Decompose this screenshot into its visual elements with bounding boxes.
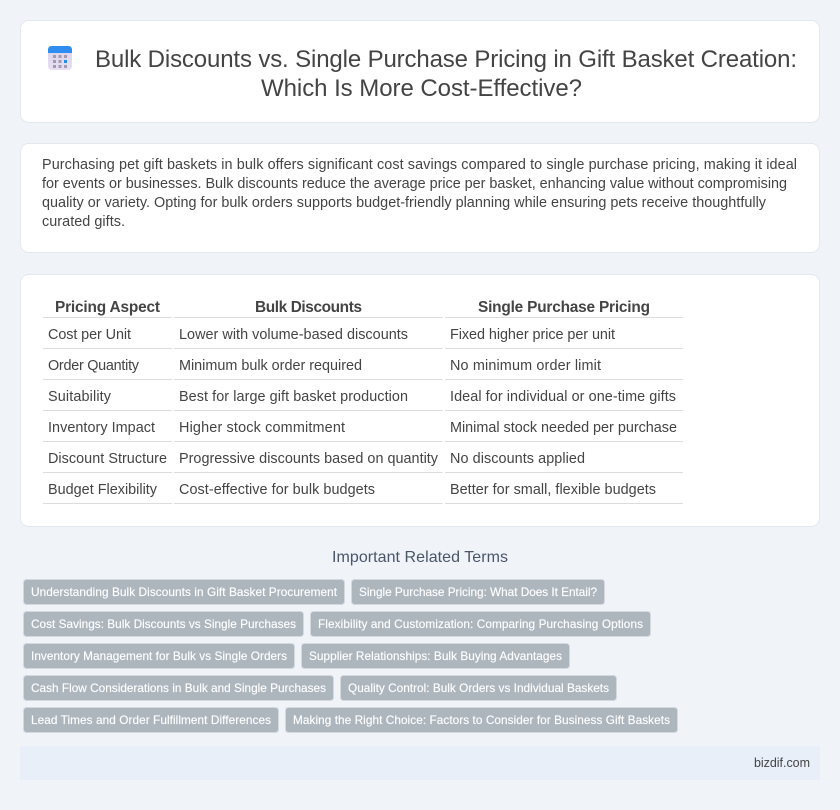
tag group: related terms (24, 580, 678, 732)
icon: calendar (48, 46, 72, 70)
table row: discount structure (48, 451, 585, 467)
table row: inventory impact: Inventory Impact (48, 420, 155, 436)
table header: Bulk Discounts (255, 299, 362, 316)
table row: budget flexibility: Budget Flexibility (48, 482, 158, 498)
table row: order quantity: No minimum order limit (450, 358, 601, 374)
table header: Single Purchase Pricing (478, 299, 650, 316)
table row: inventory impact (48, 420, 677, 436)
title (95, 46, 797, 102)
heading: related terms: Important Related Terms (332, 549, 508, 566)
table row: budget flexibility (48, 482, 656, 498)
text block: summary paragraph: Purchasing pet gift baskets in bulk offers significant cost savings compared to single purchase pricing, making it ideal (42, 157, 797, 173)
text block: summary paragraph (42, 157, 797, 230)
tag (24, 612, 304, 636)
table row: order quantity: Minimum bulk order required (179, 358, 362, 374)
tag: Making the Right Choice: Factors to Consider for Business Gift Baskets (293, 713, 670, 727)
tag (340, 676, 616, 700)
tag: Cost Savings: Bulk Discounts vs Single Purchases (31, 617, 296, 631)
tag (286, 708, 678, 732)
tag: Flexibility and Customization: Comparing Purchasing Options (318, 617, 643, 631)
table row: discount structure: Progressive discounts based on quantity (179, 451, 439, 467)
tag: Quality Control: Bulk Orders vs Individual Baskets (348, 681, 609, 695)
table row: cost per unit: Cost per Unit (48, 327, 131, 343)
tag: Inventory Management for Bulk vs Single Orders (31, 649, 287, 663)
text block: summary paragraph: curated gifts. (42, 214, 125, 230)
table row: order quantity (48, 358, 601, 374)
table row: suitability: Best for large gift basket production (179, 389, 408, 405)
tag (24, 644, 294, 668)
tag (352, 580, 604, 604)
table row: cost per unit (48, 327, 615, 343)
table row: discount structure: No discounts applied (450, 451, 585, 467)
table row: discount structure: Discount Structure (48, 451, 167, 467)
table row: suitability (48, 389, 676, 405)
table header: Pricing Aspect (55, 299, 160, 316)
tag (24, 580, 344, 604)
tag (302, 644, 570, 668)
table row: budget flexibility: Cost-effective for bulk budgets (179, 482, 375, 498)
footer (20, 746, 820, 780)
tag (24, 708, 278, 732)
title: Which Is More Cost-Effective? (261, 75, 582, 102)
table row: cost per unit: Lower with volume-based discounts (179, 327, 408, 343)
title: Bulk Discounts vs. Single Purchase Pricing in Gift Basket Creation: (95, 46, 797, 73)
table row: suitability: Suitability (48, 389, 112, 405)
table row: suitability: Ideal for individual or one-time gifts (450, 389, 676, 405)
table row: order quantity: Order Quantity (48, 358, 140, 374)
tag: Single Purchase Pricing: What Does It Entail? (359, 585, 597, 599)
footer credit: bizdif.com (754, 756, 810, 770)
tag (24, 676, 334, 700)
panel: header (20, 20, 820, 122)
tag: Lead Times and Order Fulfillment Differences (31, 713, 271, 727)
text block: summary paragraph: for events or businesses. Bulk discounts reduce the average price per basket, enhancing value without compromising (42, 176, 787, 192)
panel: summary (20, 144, 820, 252)
tag (310, 612, 650, 636)
tag: Supplier Relationships: Bulk Buying Advantages (309, 649, 562, 663)
table row: inventory impact: Minimal stock needed per purchase (450, 420, 677, 436)
tag: Understanding Bulk Discounts in Gift Basket Procurement (31, 585, 338, 599)
table header (55, 299, 650, 316)
text block: summary paragraph: quality or variety. Opting for bulk orders supports budget-friendly planning while ensuring pets receive thoughtfully (42, 195, 767, 211)
table row: inventory impact: Higher stock commitment (179, 420, 345, 436)
table row: budget flexibility: Better for small, flexible budgets (450, 482, 656, 498)
tag: Cash Flow Considerations in Bulk and Single Purchases (31, 681, 326, 695)
panel: comparison table (20, 274, 820, 526)
table row: cost per unit: Fixed higher price per unit (450, 327, 615, 343)
